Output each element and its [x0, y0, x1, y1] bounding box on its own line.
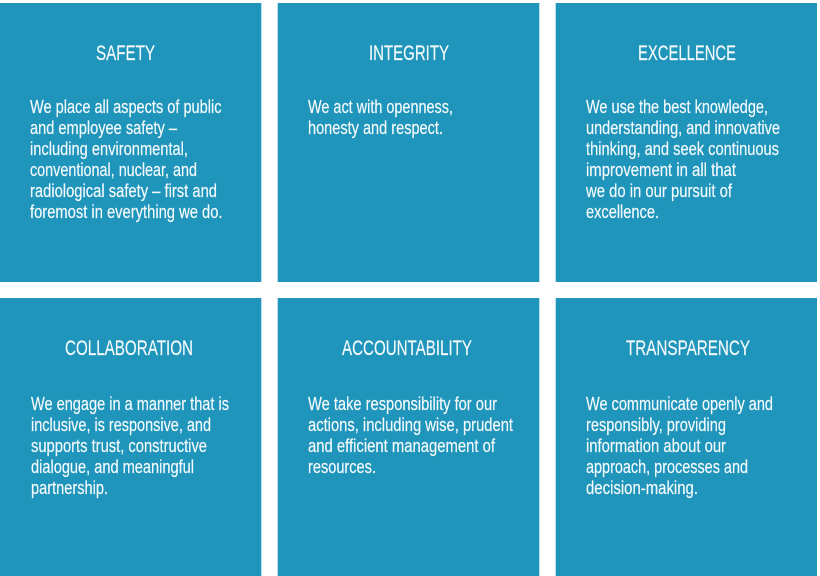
text block: accountability description: resources. [308, 457, 376, 477]
text block: transparency description: responsibly, providing [586, 415, 726, 435]
text block: integrity description: honesty and respect. [308, 118, 443, 138]
heading: excellence: EXCELLENCE [638, 42, 736, 65]
text block: accountability description: actions, including wise, prudent [308, 415, 513, 435]
text block: excellence description: excellence. [586, 202, 659, 222]
text block: integrity description [308, 97, 453, 138]
text block: transparency description: decision-making. [586, 478, 698, 498]
heading: accountability: ACCOUNTABILITY [342, 337, 472, 360]
heading: collaboration: COLLABORATION [65, 337, 193, 360]
text block: collaboration description: partnership. [31, 478, 108, 498]
text block: accountability description: We take responsibility for our [308, 394, 497, 414]
text block: excellence description: We use the best knowledge, [586, 97, 768, 117]
text block: accountability description: and efficient management of [308, 436, 496, 456]
text block: safety description: conventional, nuclear, and [30, 160, 197, 180]
text block: excellence description: we do in our pursuit of [585, 181, 733, 201]
text block: excellence description: understanding, and innovative [586, 118, 780, 138]
panel: excellence [556, 3, 817, 282]
text block: collaboration description: We engage in a manner that is [31, 394, 229, 414]
text block: transparency description: information about our [586, 436, 726, 456]
panel: integrity [278, 3, 539, 282]
panel: safety [0, 3, 261, 282]
text block: safety description [30, 97, 222, 222]
text block: collaboration description: dialogue, and meaningful [31, 457, 194, 477]
heading: safety: SAFETY [96, 42, 155, 65]
text block: accountability description [308, 394, 513, 477]
text block: collaboration description: inclusive, is responsive, and [31, 415, 211, 435]
text block: collaboration description: supports trust, constructive [31, 436, 207, 456]
text block: transparency description [586, 394, 773, 498]
text block: excellence description: thinking, and seek continuous [586, 139, 779, 159]
heading: integrity: INTEGRITY [369, 42, 449, 65]
text block: excellence description: improvement in all that [586, 160, 736, 180]
text block: transparency description: approach, processes and [586, 457, 748, 477]
heading: transparency: TRANSPARENCY [626, 337, 750, 360]
text block: collaboration description [31, 394, 229, 498]
text block: safety description: We place all aspects of public [30, 97, 222, 117]
text block: integrity description: We act with openness, [308, 97, 453, 117]
text block: transparency description: We communicate openly and [586, 394, 773, 414]
text block: excellence description [585, 97, 780, 222]
text block: safety description: radiological safety – first and [30, 181, 217, 201]
text block: safety description: including environmental, [30, 139, 188, 159]
panel: collaboration [0, 298, 261, 576]
panel: accountability [278, 298, 539, 576]
panel: transparency [556, 298, 817, 576]
text block: safety description: foremost in everything we do. [30, 202, 222, 222]
text block: safety description: and employee safety – [30, 118, 177, 138]
